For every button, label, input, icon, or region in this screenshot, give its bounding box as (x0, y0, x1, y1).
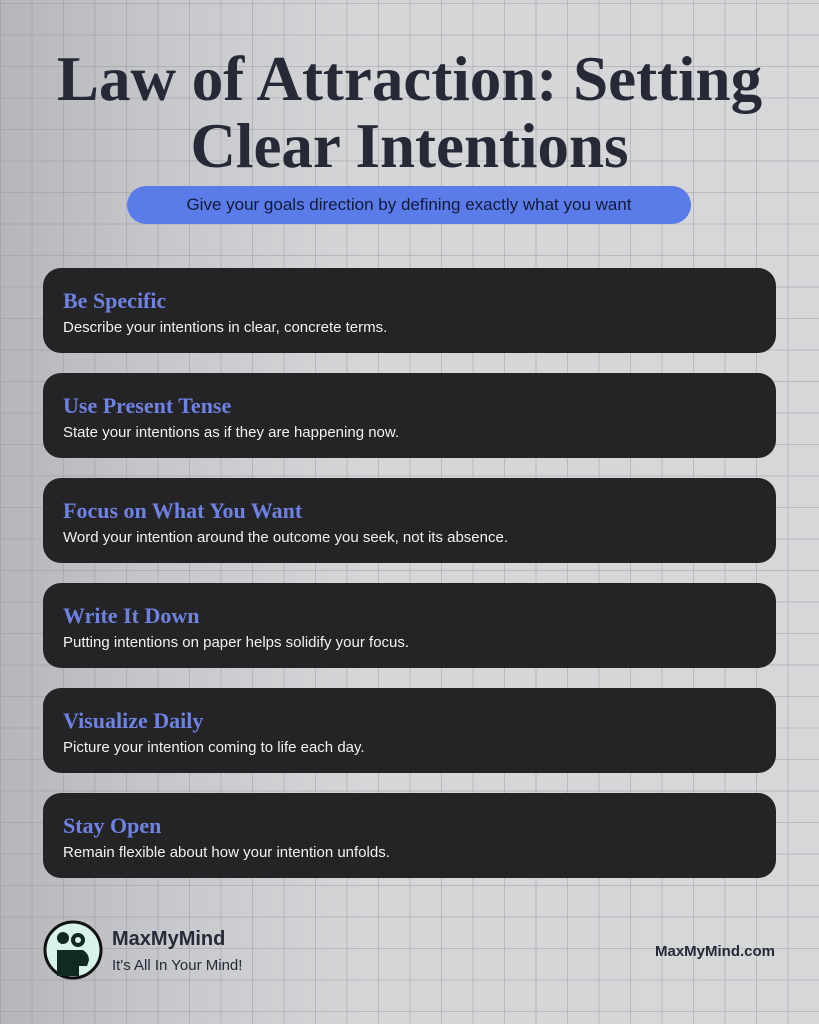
card: be specific: Describe your intentions in clear, concrete terms. (63, 319, 387, 336)
card: write: Write It Down (63, 603, 199, 628)
title: Law of Attraction: Setting (57, 44, 762, 114)
card: be specific: Be Specific (63, 288, 166, 313)
brand text: MaxMyMind (112, 928, 225, 950)
title (57, 44, 762, 181)
card: stay open: Remain flexible about how your intention unfolds. (63, 844, 390, 861)
card: focus (43, 478, 776, 563)
logo (44, 920, 102, 980)
card: present tense (43, 373, 776, 458)
card: visualize: Picture your intention coming to life each day. (63, 739, 365, 756)
brand text: It's All In Your Mind! (112, 957, 242, 974)
subtitle pill: Give your goals direction by defining exactly what you want (186, 195, 632, 214)
card: stay open: Stay Open (63, 813, 161, 838)
card: write (43, 583, 776, 668)
card: write: Putting intentions on paper helps solidify your focus. (63, 634, 409, 651)
subtitle pill (127, 186, 691, 224)
brand text (112, 928, 242, 974)
title: Clear Intentions (190, 111, 629, 181)
card: stay open (43, 793, 776, 878)
card: be specific (43, 268, 776, 353)
card: visualize (43, 688, 776, 773)
card: focus: Word your intention around the outcome you seek, not its absence. (63, 529, 508, 546)
website: MaxMyMind.com (655, 943, 775, 960)
card: focus: Focus on What You Want (63, 498, 302, 523)
card: present tense: Use Present Tense (63, 393, 231, 418)
card: visualize: Visualize Daily (63, 708, 203, 733)
card: present tense: State your intentions as if they are happening now. (63, 424, 399, 441)
